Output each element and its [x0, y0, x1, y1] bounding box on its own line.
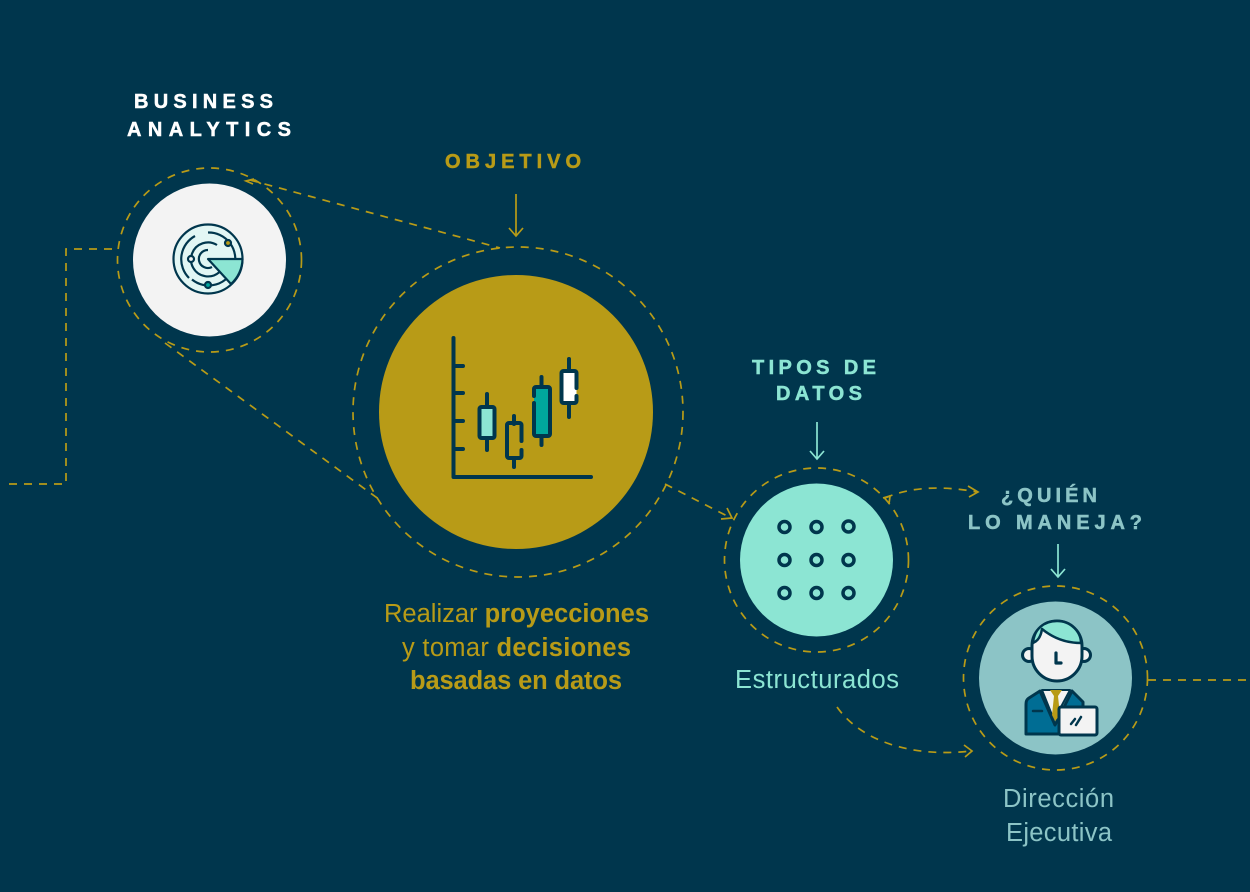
heading: quien lo maneja: LO MANEJA?	[968, 512, 1142, 534]
panel: tipos de datos circle	[724, 468, 908, 652]
text: estructurados: Estructurados	[735, 666, 899, 694]
text: objetivo description: y tomar decisiones	[402, 634, 631, 662]
heading: business analytics: ANALYTICS	[127, 119, 291, 141]
heading: tipos de datos: DATOS	[776, 383, 862, 405]
connector: business analytics to objetivo	[165, 179, 500, 500]
heading: business analytics: BUSINESS	[134, 91, 273, 113]
text: objetivo description	[384, 600, 649, 695]
connector: tipos de datos to quien lo maneja	[883, 486, 978, 504]
text: direccion ejecutiva: Ejecutiva	[1006, 819, 1113, 847]
panel: objetivo circle	[353, 247, 683, 577]
text: direccion ejecutiva: Dirección	[1003, 785, 1114, 813]
panel: business analytics circle	[118, 168, 302, 352]
panel: direccion ejecutiva circle	[964, 586, 1148, 770]
arrow: objetivo	[509, 194, 523, 236]
text: objetivo description: basadas en datos	[410, 667, 622, 695]
text: direccion ejecutiva	[1003, 785, 1114, 847]
icon: executive with laptop	[1022, 621, 1097, 735]
heading: objetivo: OBJETIVO	[445, 151, 581, 173]
connector: right exit line	[1148, 679, 1250, 681]
connector: left entry line	[9, 249, 118, 484]
arrow: quien lo maneja	[1051, 544, 1065, 577]
icon: candlestick chart	[454, 338, 591, 477]
connector: estructurados to direccion	[837, 707, 972, 757]
connector: objetivo to tipos de datos	[665, 484, 732, 519]
icon: radar	[174, 224, 242, 294]
heading: business analytics	[127, 91, 291, 141]
heading: tipos de datos	[752, 357, 876, 405]
arrow: tipos de datos	[810, 422, 824, 459]
heading: tipos de datos: TIPOS DE	[752, 357, 876, 379]
icon: dot grid	[779, 521, 854, 598]
heading: quien lo maneja	[968, 484, 1142, 534]
text: objetivo description: Realizar proyecciones	[384, 600, 649, 628]
heading: quien lo maneja: ¿QUIÉN	[1001, 484, 1097, 507]
